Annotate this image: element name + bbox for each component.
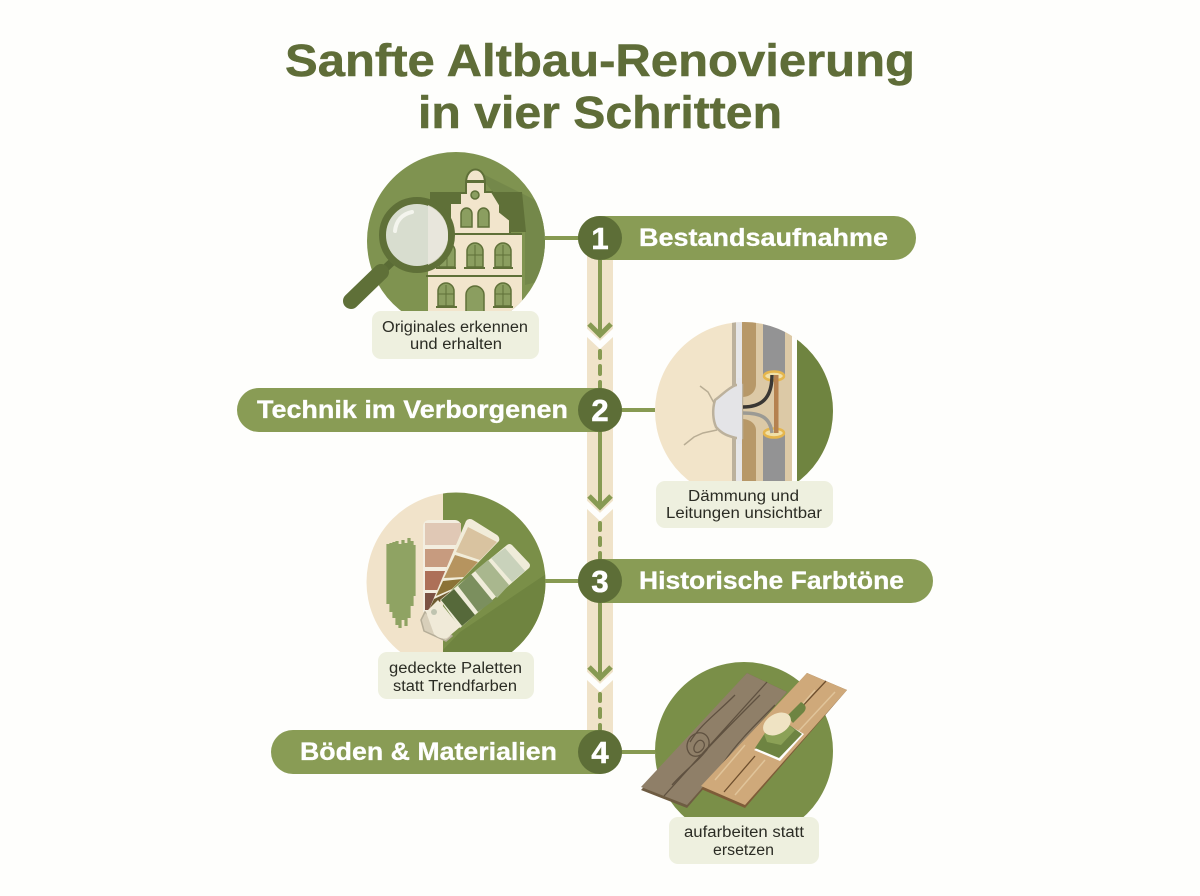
connector lines xyxy=(545,238,655,752)
step 2 xyxy=(237,388,622,432)
step 3: Historische Farbtöne xyxy=(639,567,904,595)
step 3 xyxy=(578,559,933,603)
caption 2: Dämmung und xyxy=(688,488,799,505)
caption 3: gedeckte Paletten xyxy=(389,660,522,677)
step 4 xyxy=(271,730,622,774)
illustration 2: wall section xyxy=(655,322,833,481)
icon: magnifier xyxy=(351,200,452,301)
brush stroke xyxy=(388,538,414,628)
step 1: Bestandsaufnahme xyxy=(639,224,888,252)
step 1 xyxy=(578,216,916,260)
icon: colour swatches xyxy=(421,519,530,641)
caption 3: statt Trendfarben xyxy=(393,678,517,695)
step 4: Böden & Materialien xyxy=(300,738,557,766)
caption 4 xyxy=(669,817,819,864)
title xyxy=(285,35,915,138)
sanded plank xyxy=(701,673,847,808)
caption 1: und erhalten xyxy=(410,336,502,353)
icon: sander xyxy=(754,702,806,761)
title: in vier Schritten xyxy=(418,87,782,138)
illustration 3: colour fan xyxy=(366,492,546,652)
caption 3 xyxy=(378,652,534,699)
caption 2: Leitungen unsichtbar xyxy=(666,505,822,522)
worn plank xyxy=(641,673,787,808)
caption 2 xyxy=(656,481,833,528)
timeline: vertical band with arrows xyxy=(585,255,615,750)
illustration 4: floorboards and sander xyxy=(641,662,847,840)
step 2: Technik im Verborgenen xyxy=(257,396,568,424)
title: Sanfte Altbau-Renovierung xyxy=(285,35,915,86)
caption 4: ersetzen xyxy=(713,842,774,859)
step 1: 1 xyxy=(591,221,609,256)
caption 1: Originales erkennen xyxy=(382,319,528,336)
step 4: 4 xyxy=(591,735,609,770)
step 2: 2 xyxy=(591,393,609,428)
illustration 1: house and magnifier xyxy=(351,152,545,330)
step 3: 3 xyxy=(591,564,609,599)
caption 1 xyxy=(372,311,539,359)
caption 4: aufarbeiten statt xyxy=(684,824,805,841)
